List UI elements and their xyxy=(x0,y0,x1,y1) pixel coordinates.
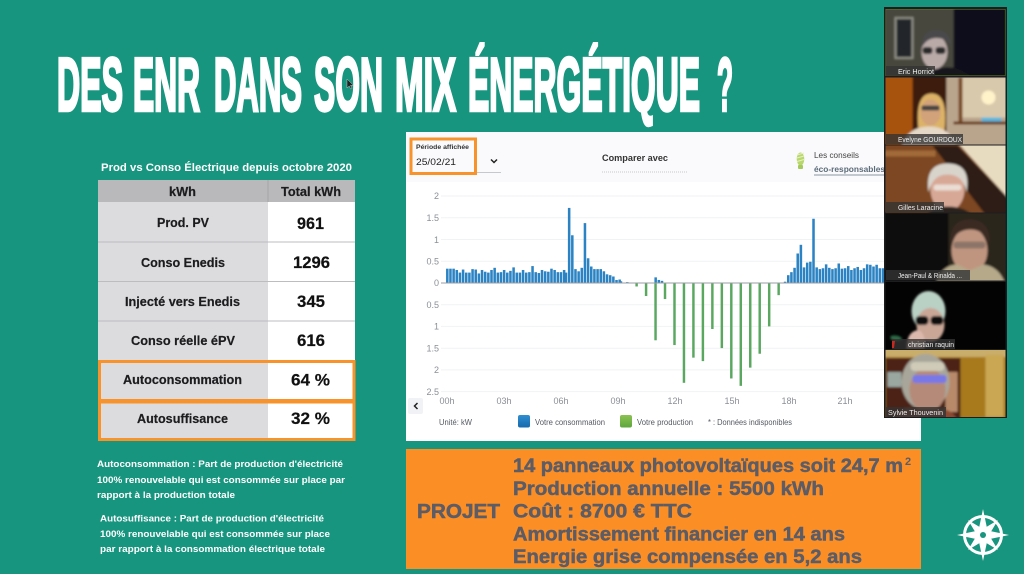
title: MIX xyxy=(395,42,456,126)
date selector: Période affichée xyxy=(416,144,469,151)
row: Autoconsommation: Autoconsommation xyxy=(123,372,242,387)
project label: PROJET xyxy=(417,501,500,523)
x axis labels: 06h xyxy=(553,396,569,406)
y axis labels xyxy=(426,191,439,397)
y axis labels: 1 xyxy=(434,235,439,245)
row: Prod. PV xyxy=(157,215,324,233)
row: Injecté vers Enedis: 345 xyxy=(297,293,325,311)
row: Autosuffisance: 32 % xyxy=(291,410,330,428)
name label: Evelyne GOURDOUX xyxy=(898,137,962,144)
y axis labels: 1.5 xyxy=(426,213,439,223)
name label: Jean-Paul & Rinalda ... xyxy=(898,273,962,280)
row: Conso Enedis: Conso Enedis xyxy=(141,255,225,270)
zero axis line xyxy=(441,282,885,284)
panel: video participants xyxy=(880,5,1014,421)
project facts: 2 xyxy=(905,456,911,468)
y axis labels: 1.5 xyxy=(426,344,439,354)
text block: autoconsommation definition: rapport à la production totale xyxy=(97,490,235,501)
legend: * : Données indisponibles xyxy=(708,417,792,427)
production bars xyxy=(635,283,780,386)
row: Autoconsommation: 64 % xyxy=(291,372,330,390)
legend xyxy=(439,415,792,428)
icon: eco bulb xyxy=(797,152,804,169)
icon: mouse cursor xyxy=(347,79,353,89)
table header: Total kWh xyxy=(281,184,341,199)
y axis labels: 1 xyxy=(434,322,439,332)
name label: Gilles Laracine xyxy=(898,205,943,212)
table header: kWh xyxy=(169,184,196,199)
x axis labels: 00h xyxy=(439,396,455,406)
row: Autosuffisance: Autosuffisance xyxy=(137,411,228,426)
compare control: Comparer avec xyxy=(602,153,668,164)
legend: Unité: kW xyxy=(439,417,472,427)
legend: Votre production xyxy=(637,417,693,427)
icon: compass rose xyxy=(957,509,1009,561)
row: Autosuffisance xyxy=(100,402,354,440)
project facts: Production annuelle : 5500 kWh xyxy=(513,478,824,500)
x axis labels: 03h xyxy=(496,396,512,406)
legend: Votre consommation xyxy=(535,417,605,427)
project facts: Coût : 8700 € TTC xyxy=(513,500,692,522)
row: Prod. PV: Prod. PV xyxy=(157,215,209,230)
video tile: Jean-Paul and Rinalda xyxy=(880,208,1010,284)
text block: autosuffisance definition xyxy=(100,514,330,555)
eco tips link: éco-responsables xyxy=(814,164,885,174)
consumption bars xyxy=(446,208,891,283)
x axis labels: 21h xyxy=(837,396,853,406)
text block: autoconsommation definition: 100% renouvelable qui est consommée sur place par xyxy=(97,475,345,486)
eco tips link xyxy=(814,150,885,175)
x axis labels xyxy=(439,396,853,406)
y axis labels: 2 xyxy=(434,191,439,201)
text block: autosuffisance definition: Autosuffisance : Part de production d'électricité xyxy=(100,514,324,524)
x axis labels: 09h xyxy=(610,396,626,406)
row: Conso réelle éPV: 616 xyxy=(297,332,325,350)
video tile: Christian Raquin xyxy=(886,282,1006,349)
panel: project summary xyxy=(406,449,921,569)
table header xyxy=(169,184,341,199)
row: Conso Enedis xyxy=(141,254,330,272)
date selector: 25/02/21 xyxy=(416,157,456,168)
title: SON xyxy=(314,42,383,126)
text block: autosuffisance definition: 100% renouvelable qui est consommée sur place xyxy=(100,529,330,540)
text: ? xyxy=(717,42,733,126)
video tile: Sylvie Thouvenin xyxy=(880,345,1010,421)
name label: christian raquin xyxy=(908,342,954,349)
row: Conso Enedis: 1296 xyxy=(293,254,330,272)
eco tips link: Les conseils xyxy=(814,150,859,160)
row: Conso réelle éPV xyxy=(131,332,325,350)
y axis labels: 0 xyxy=(434,278,439,288)
row: Autoconsommation xyxy=(100,362,354,400)
row: Prod. PV: 961 xyxy=(297,215,324,233)
name label: Eric Horriot xyxy=(898,69,934,76)
title xyxy=(57,42,733,126)
project facts xyxy=(513,455,911,568)
y axis labels: 0.5 xyxy=(426,300,439,310)
video tile: Eric Horriot xyxy=(880,5,1014,80)
x axis labels: 18h xyxy=(781,396,797,406)
text block: autoconsommation definition xyxy=(97,459,345,501)
y axis labels: 2 xyxy=(434,365,439,375)
video tile: Evelyne Gourdoux xyxy=(880,72,1010,148)
table heading: Prod vs Conso Électrique depuis octobre 2020 xyxy=(101,161,352,174)
text block: autoconsommation definition: Autoconsommation : Part de production d'électricité xyxy=(97,459,343,470)
compare control xyxy=(602,153,687,172)
row: Conso réelle éPV: Conso réelle éPV xyxy=(131,333,235,348)
project facts: Amortissement financier en 14 ans xyxy=(513,524,845,546)
panel: energy table xyxy=(98,161,355,441)
y axis labels: 2.5 xyxy=(426,387,439,397)
x axis labels: 12h xyxy=(667,396,683,406)
title: DANS xyxy=(214,42,302,126)
x axis labels: 15h xyxy=(724,396,740,406)
project facts: 14 panneaux photovoltaïques soit 24,7 m xyxy=(513,455,903,477)
name label: Sylvie Thouvenin xyxy=(888,410,943,417)
grid lines xyxy=(441,196,885,392)
text block: autosuffisance definition: par rapport à la consommation électrique totale xyxy=(100,544,325,555)
title: ENR xyxy=(133,42,200,126)
project facts: Energie grise compensée en 5,2 ans xyxy=(513,546,862,568)
title: DES xyxy=(57,42,123,126)
date selector xyxy=(411,139,501,174)
text: ÉNERGÉTIQUE xyxy=(468,42,700,126)
y axis labels: 0.5 xyxy=(426,256,439,266)
panel: production chart xyxy=(406,132,921,441)
table background xyxy=(98,180,355,441)
video tile: Gilles Laracine xyxy=(880,140,1010,218)
scroll button xyxy=(408,398,423,414)
row: Injecté vers Enedis: Injecté vers Enedis xyxy=(125,294,240,309)
row: Injecté vers Enedis xyxy=(125,293,325,311)
